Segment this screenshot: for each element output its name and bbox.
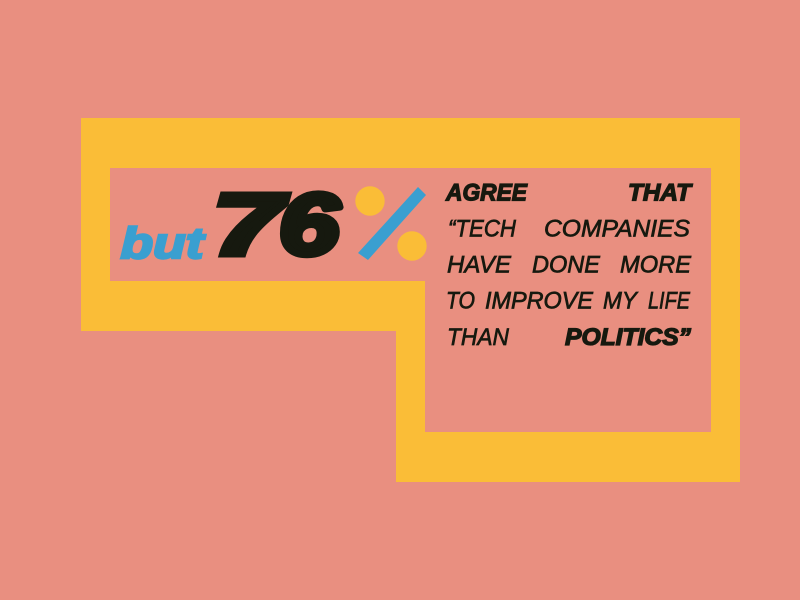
line 2 [448, 216, 690, 243]
line 5 [447, 324, 691, 351]
digit 6: 6 [279, 177, 340, 273]
line 4 [446, 288, 691, 315]
line 4: LIFE [648, 288, 691, 315]
percent sign [355, 186, 427, 261]
line 2: “TECH [448, 216, 517, 243]
digit 7: 7 [213, 177, 288, 273]
line 4: IMPROVE [485, 288, 594, 315]
line 2: COMPANIES [544, 216, 690, 243]
statistic: 76% [213, 177, 427, 273]
line 3: HAVE [447, 252, 512, 279]
quote text block [445, 180, 693, 351]
line 1: THAT [628, 180, 693, 206]
line 1: AGREE [445, 180, 528, 206]
line 5: THAN [447, 324, 510, 351]
line 3: MORE [620, 252, 692, 279]
line 4: MY [603, 288, 639, 315]
line 5: POLITICS” [565, 324, 691, 351]
line 1 [445, 180, 693, 206]
line 3 [447, 252, 692, 279]
line 3: DONE [532, 252, 601, 279]
yellow frame [81, 118, 740, 482]
line 4: TO [446, 288, 475, 315]
word: but: but [120, 219, 206, 268]
